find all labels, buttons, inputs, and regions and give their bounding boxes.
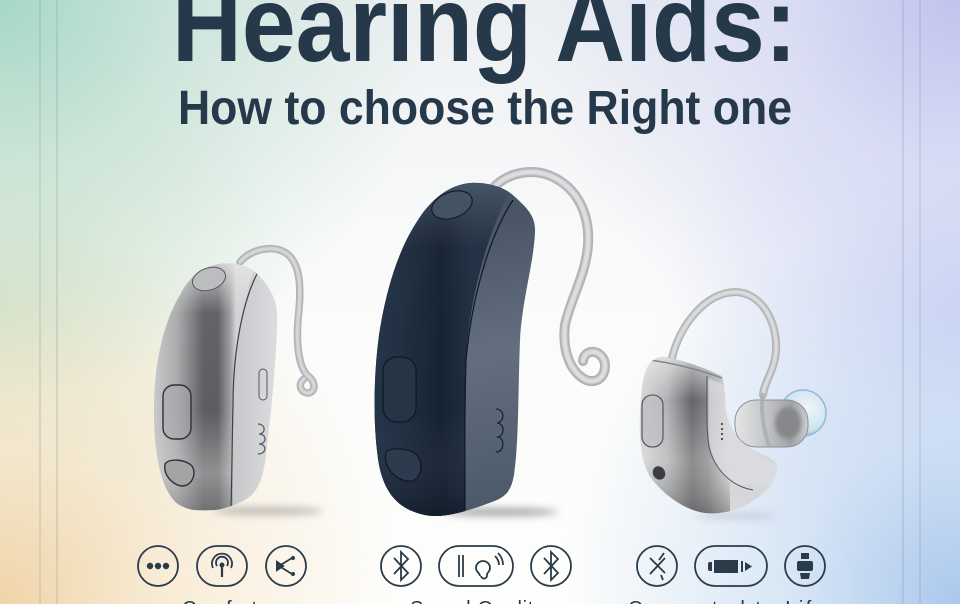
icon: hearing signal bbox=[197, 546, 247, 586]
hearing aid: silver left bbox=[150, 249, 323, 515]
subtitle: How to choose the Right one bbox=[178, 82, 792, 135]
icon row: comfort bbox=[138, 546, 306, 586]
icon: watch bbox=[785, 546, 825, 586]
hearing aid: silver with ear dome bbox=[635, 292, 826, 520]
icon: share nodes bbox=[266, 546, 306, 586]
hearing aid: navy centre bbox=[370, 172, 605, 525]
icon row: connected to life bbox=[637, 546, 825, 586]
icon: three dots bbox=[138, 546, 178, 586]
icon row: sound quality bbox=[381, 546, 571, 586]
icon: sound waves pill bbox=[439, 546, 513, 586]
icon: battery pill bbox=[695, 546, 767, 586]
icon: bluetooth crossed bbox=[637, 546, 677, 586]
icon: bluetooth bbox=[531, 546, 571, 586]
icon: bluetooth bbox=[381, 546, 421, 586]
